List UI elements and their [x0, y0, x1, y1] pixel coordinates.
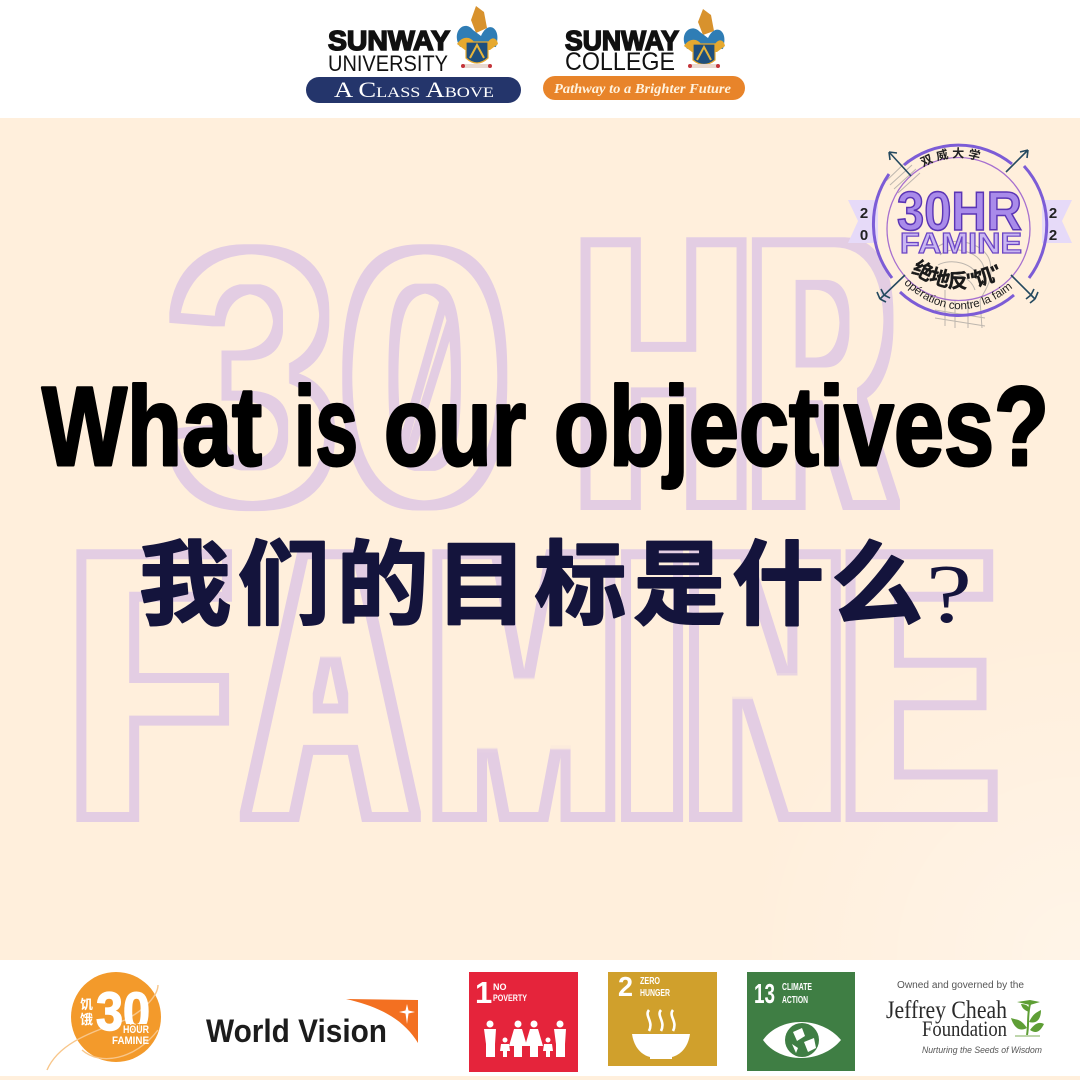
footer logo: 30 Hour Famine — [47, 972, 161, 1070]
icon: eye with globe — [763, 1022, 841, 1058]
badge text: university name: 双 威 大 学 — [920, 147, 980, 168]
heading: Chinese question: 我们的目标是什么 — [139, 535, 923, 637]
footer logo: 30 Hour Famine: 饥 — [80, 997, 93, 1012]
crest: Sunway University — [457, 6, 498, 68]
heading: English question — [42, 364, 1049, 489]
SDG tile: 1 No Poverty: POVERTY — [493, 993, 527, 1003]
watermark: 30 HR FAMINE outline: F — [72, 471, 228, 898]
watermark: 30 HR FAMINE outline: 0 — [336, 174, 514, 579]
footer logo: 30 Hour Famine: FAMINE — [112, 1035, 149, 1047]
watermark: 30 HR FAMINE outline: R — [752, 159, 891, 586]
SDG tile: 13 Climate Action: CLIMATE — [782, 982, 812, 993]
arrows — [877, 150, 1038, 303]
footer logo: 30 Hour Famine: HOUR — [123, 1024, 149, 1036]
watermark: 30 HR FAMINE outline — [72, 159, 994, 898]
SDG tile: 2 Zero Hunger — [608, 971, 717, 1066]
footer logo: World Vision: World Vision — [206, 1013, 387, 1049]
SDG tile: 13 Climate Action: 13 — [754, 978, 775, 1009]
watermark: 30 HR FAMINE outline: A — [247, 471, 414, 898]
header logo: Sunway College — [543, 9, 745, 100]
caption: owned and governed: Owned and governed by the — [897, 980, 1024, 991]
SDG tile: 1 No Poverty — [469, 972, 578, 1072]
rings — [873, 145, 1047, 315]
watermark: 30 HR FAMINE outline: M — [430, 471, 617, 898]
icon: family — [484, 1020, 566, 1057]
wordmark: Sunway University: UNIVERSITY — [328, 51, 448, 76]
footer logo: 30 Hour Famine: 饿 — [80, 1012, 93, 1027]
watermark: 30 HR FAMINE outline: N — [688, 471, 842, 898]
watermark: 30 HR FAMINE outline: 3 — [164, 174, 340, 579]
SDG tile: 1 No Poverty: NO — [493, 982, 506, 992]
wordmark: Foundation — [922, 1016, 1007, 1041]
SDG tile: 1 No Poverty: 1 — [475, 975, 492, 1010]
footer logo: 30 Hour Famine: 30 — [96, 982, 150, 1042]
SDG tile: 13 Climate Action — [747, 972, 855, 1071]
icon: seedling — [1011, 1000, 1044, 1036]
header logo: Sunway University — [306, 6, 521, 103]
badge text: French slogan: opération contre la faim — [905, 280, 1012, 310]
heading: English question: What — [42, 364, 262, 489]
SDG tile: 2 Zero Hunger: ZERO — [640, 976, 660, 987]
badge title: FAMINE: FAMINE — [900, 228, 1022, 260]
SDG tile: 2 Zero Hunger: 2 — [618, 971, 633, 1002]
wordmark: Sunway College: SUNWAY — [565, 25, 679, 56]
watermark: 30 HR FAMINE outline: H — [578, 159, 750, 586]
pill: Pathway to a Brighter Future: Pathway to a Brighter Future — [554, 81, 731, 96]
badge: 30HR Famine 2022 — [848, 144, 1072, 328]
ribbon: right with 22: 2 — [1049, 227, 1057, 244]
badge title: 30HR: 30HR — [897, 180, 1022, 242]
SDG tile: 13 Climate Action: ACTION — [782, 995, 808, 1006]
ribbon: left with 20: 2 — [860, 205, 868, 222]
badge text: Chinese slogan: 绝地反"饥" — [911, 258, 999, 290]
SDG tile: 2 Zero Hunger: HUNGER — [640, 988, 671, 999]
wordmark: Jeffrey Cheah — [886, 997, 1007, 1024]
footer logo: Jeffrey Cheah Foundation — [886, 980, 1044, 1056]
watermark: 30 HR FAMINE outline: I — [617, 471, 687, 898]
heading: English question: our — [384, 364, 526, 489]
wordmark: Sunway College: COLLEGE — [565, 48, 675, 76]
heading: English question: is — [294, 364, 358, 489]
ribbon: left with 20: 0 — [860, 227, 868, 244]
sketch: fork and fist — [886, 160, 991, 328]
wordmark: Sunway College — [565, 25, 679, 76]
ribbon: right with 22 — [1042, 200, 1072, 244]
wordmark — [886, 997, 1007, 1041]
pill: A Class Above — [306, 77, 521, 103]
ribbon: right with 22: 2 — [1049, 205, 1057, 222]
wordmark: Sunway University — [328, 25, 450, 76]
ribbon: left with 20 — [848, 200, 878, 244]
wordmark: Sunway University: SUNWAY — [328, 25, 450, 56]
crest: Sunway College — [684, 9, 725, 68]
icon: bowl — [632, 1010, 690, 1059]
heading: Chinese question: ? — [926, 548, 972, 641]
footer logo: World Vision — [206, 999, 418, 1049]
pill: Pathway to a Brighter Future — [543, 76, 745, 100]
pill: A Class Above: A Class Above — [334, 77, 494, 102]
tagline: Nurturing the Seeds of Wisdom — [922, 1045, 1042, 1056]
